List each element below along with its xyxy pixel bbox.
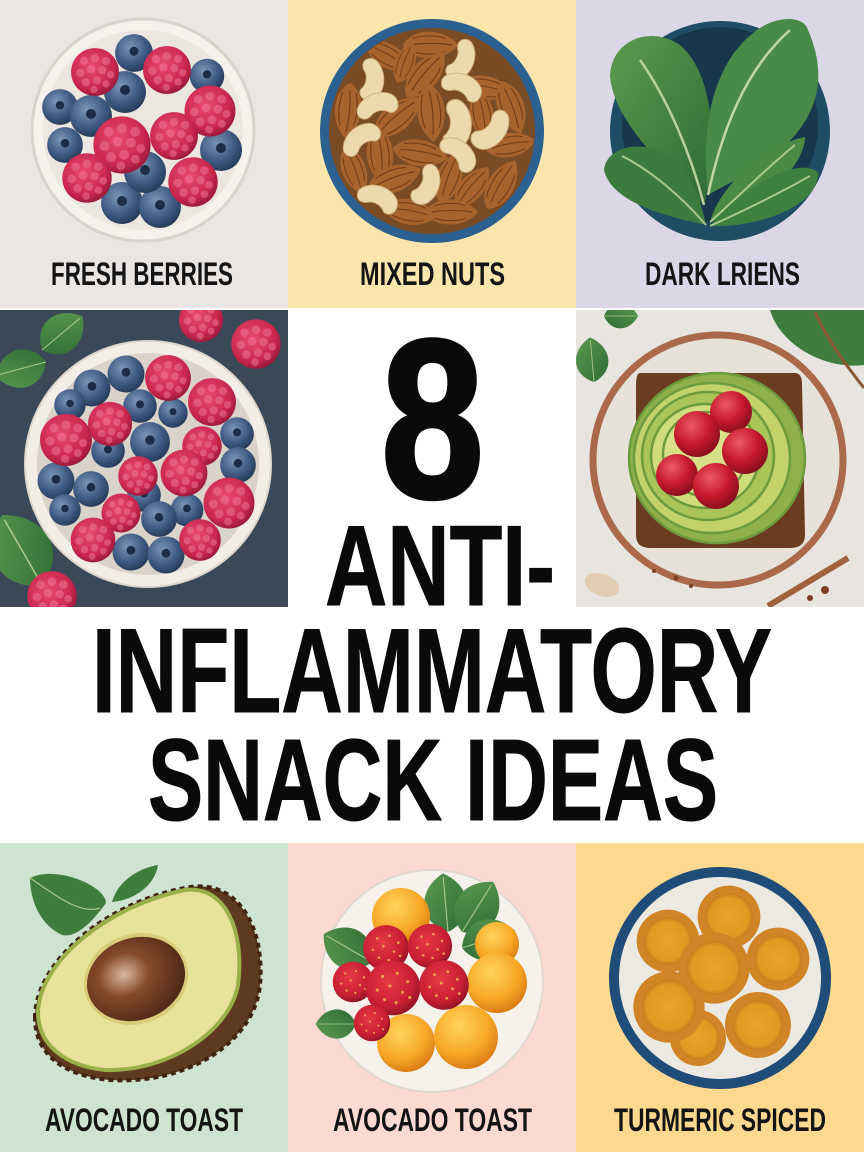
icon: loose raspberries bbox=[27, 298, 281, 621]
label: fresh berries: FRESH BERRIES bbox=[51, 256, 233, 292]
icon: bowl of nuts bbox=[320, 19, 544, 243]
icon: bowl of spinach bbox=[604, 19, 830, 241]
icon: plate bbox=[593, 335, 843, 585]
title: 8 bbox=[381, 292, 484, 545]
panel: dark greens bbox=[576, 0, 864, 308]
panel: berries on dark background bbox=[0, 298, 288, 621]
panel: strawberries and tomatoes bbox=[288, 843, 576, 1152]
label: avocado toast: AVOCADO TOAST bbox=[45, 1102, 243, 1138]
panel: avocado bbox=[0, 843, 288, 1152]
label: mixed nuts: MIXED NUTS bbox=[360, 256, 505, 292]
panel: mixed nuts bbox=[288, 0, 576, 308]
label: avocado toast: AVOCADO TOAST bbox=[333, 1102, 532, 1138]
icon: leaves bbox=[574, 304, 864, 388]
icon: bowl of berries bbox=[32, 19, 254, 241]
icon: bowl of fruit bbox=[314, 870, 543, 1092]
panel: avocado toast plate bbox=[574, 304, 864, 607]
icon: avocado slices bbox=[629, 373, 805, 543]
icon: plate of turmeric bites bbox=[609, 867, 831, 1089]
panel: fresh berries bbox=[0, 0, 288, 308]
icon: almond and crumbs bbox=[581, 558, 848, 606]
label: dark greens: DARK LRIENS bbox=[645, 256, 800, 292]
icon: leaves bbox=[0, 313, 84, 586]
panel: turmeric spiced bbox=[576, 843, 864, 1152]
title bbox=[92, 292, 772, 845]
icon: avocado half bbox=[30, 865, 261, 1080]
icon: toast bbox=[629, 373, 805, 548]
icon: white bowl of berries bbox=[25, 341, 271, 587]
title: ANTI- bbox=[325, 503, 555, 630]
